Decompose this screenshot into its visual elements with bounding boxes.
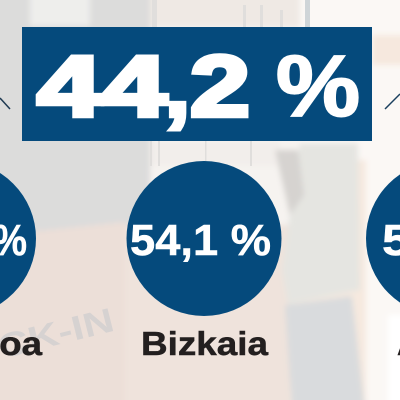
arrow: left <box>0 98 10 109</box>
circle: Gipuzkoa value <box>0 161 36 316</box>
arrow: right <box>385 94 400 109</box>
headline panel: 44,2 %: 2 <box>190 39 250 135</box>
headline panel: 44,2 %: , <box>165 39 190 135</box>
headline panel: 44,2 %: % <box>276 39 360 135</box>
headline panel: 44,2 %: 44 <box>37 39 167 135</box>
circle: Bizkaia value <box>126 161 282 316</box>
circle: Araba value <box>366 161 400 316</box>
headline panel: 44,2 % <box>22 27 372 141</box>
circle: Bizkaia value: 54,1 % <box>130 216 271 265</box>
label: Bizkaia: Bizkaia <box>141 325 269 362</box>
